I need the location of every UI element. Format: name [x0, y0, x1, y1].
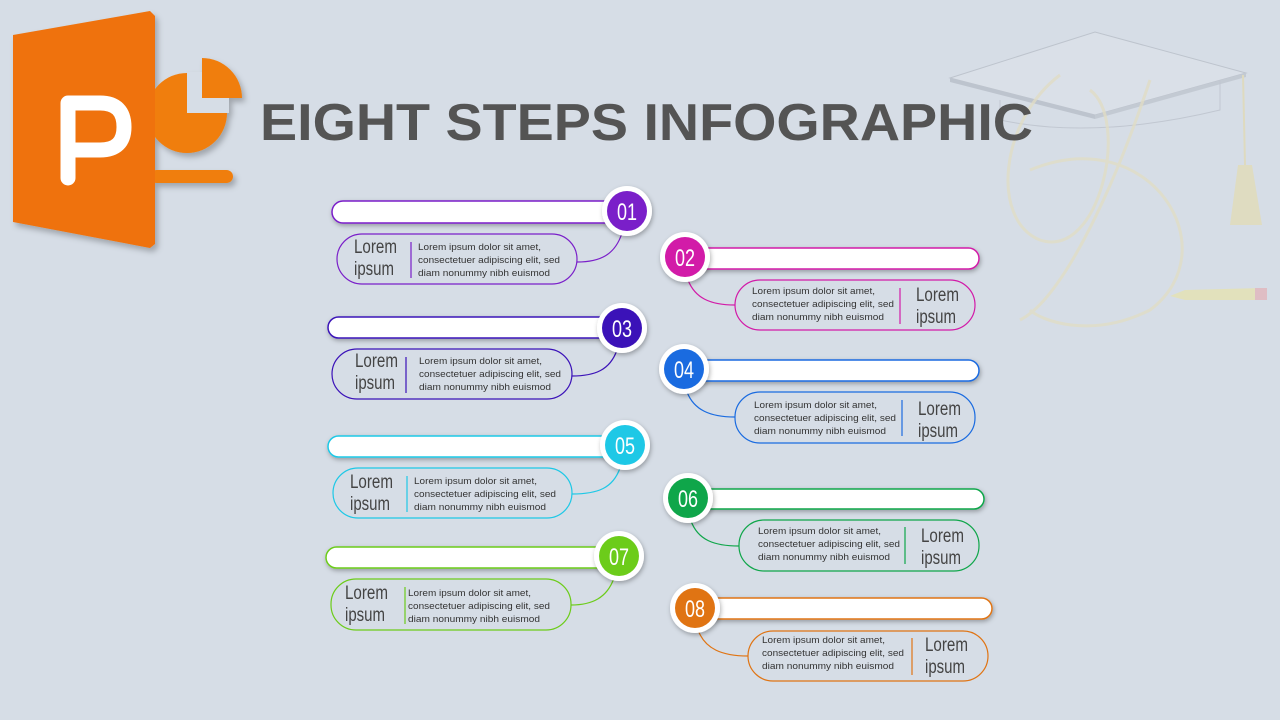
step 05: Lorem [350, 472, 393, 493]
step 03: diam nonummy nibh euismod [419, 382, 551, 393]
step 07: 07 [609, 544, 629, 571]
step 07: consectetuer adipiscing elit, sed [408, 601, 550, 612]
step 01: ipsum [354, 259, 394, 280]
step 04: 04 [674, 357, 694, 384]
step 03 [328, 303, 647, 399]
step 08: diam nonummy nibh euismod [762, 661, 894, 672]
step 01 [332, 186, 652, 284]
step 02: diam nonummy nibh euismod [752, 312, 884, 323]
step 08: 08 [685, 596, 705, 623]
step 08: Lorem ipsum dolor sit amet, [762, 635, 885, 646]
step 03: Lorem [355, 351, 398, 372]
step 01: diam nonummy nibh euismod [418, 268, 550, 279]
step 02 [660, 232, 979, 330]
step 02: ipsum [916, 307, 956, 328]
step 01: Lorem [354, 237, 397, 258]
step 05: 05 [615, 433, 635, 460]
step 06: consectetuer adipiscing elit, sed [758, 539, 900, 550]
step 03: consectetuer adipiscing elit, sed [419, 369, 561, 380]
step 05: ipsum [350, 494, 390, 515]
step 03: ipsum [355, 373, 395, 394]
step 07 [326, 531, 644, 630]
watermark: graduation cap logo [950, 32, 1267, 326]
step 02: Lorem [916, 285, 959, 306]
step 07: diam nonummy nibh euismod [408, 614, 540, 625]
step 02: consectetuer adipiscing elit, sed [752, 299, 894, 310]
step 04: diam nonummy nibh euismod [754, 426, 886, 437]
step 08: consectetuer adipiscing elit, sed [762, 648, 904, 659]
step 02: 02 [675, 245, 695, 272]
step 06 [663, 473, 984, 571]
step 05: diam nonummy nibh euismod [414, 502, 546, 513]
step 06: diam nonummy nibh euismod [758, 552, 890, 563]
step 05: Lorem ipsum dolor sit amet, [414, 476, 537, 487]
step 07: Lorem [345, 583, 388, 604]
step 07: Lorem ipsum dolor sit amet, [408, 588, 531, 599]
step 08 [670, 583, 992, 681]
step 03: 03 [612, 316, 632, 343]
step 01: 01 [617, 199, 637, 226]
step 04 [659, 344, 979, 443]
step 07: ipsum [345, 605, 385, 626]
step 08: Lorem [925, 635, 968, 656]
step 03: Lorem ipsum dolor sit amet, [419, 356, 542, 367]
title: EIGHT STEPS INFOGRAPHIC [260, 94, 1033, 152]
step 06: Lorem ipsum dolor sit amet, [758, 526, 881, 537]
step 08: ipsum [925, 657, 965, 678]
step 01: consectetuer adipiscing elit, sed [418, 255, 560, 266]
step 05 [328, 420, 650, 518]
step 04: Lorem [918, 399, 961, 420]
step 01: Lorem ipsum dolor sit amet, [418, 242, 541, 253]
step 06: ipsum [921, 548, 961, 569]
icon: PowerPoint logo [13, 11, 242, 248]
step 04: consectetuer adipiscing elit, sed [754, 413, 896, 424]
step 04: Lorem ipsum dolor sit amet, [754, 400, 877, 411]
step 06: 06 [678, 486, 698, 513]
step 06: Lorem [921, 526, 964, 547]
step 04: ipsum [918, 421, 958, 442]
step 02: Lorem ipsum dolor sit amet, [752, 286, 875, 297]
step 05: consectetuer adipiscing elit, sed [414, 489, 556, 500]
